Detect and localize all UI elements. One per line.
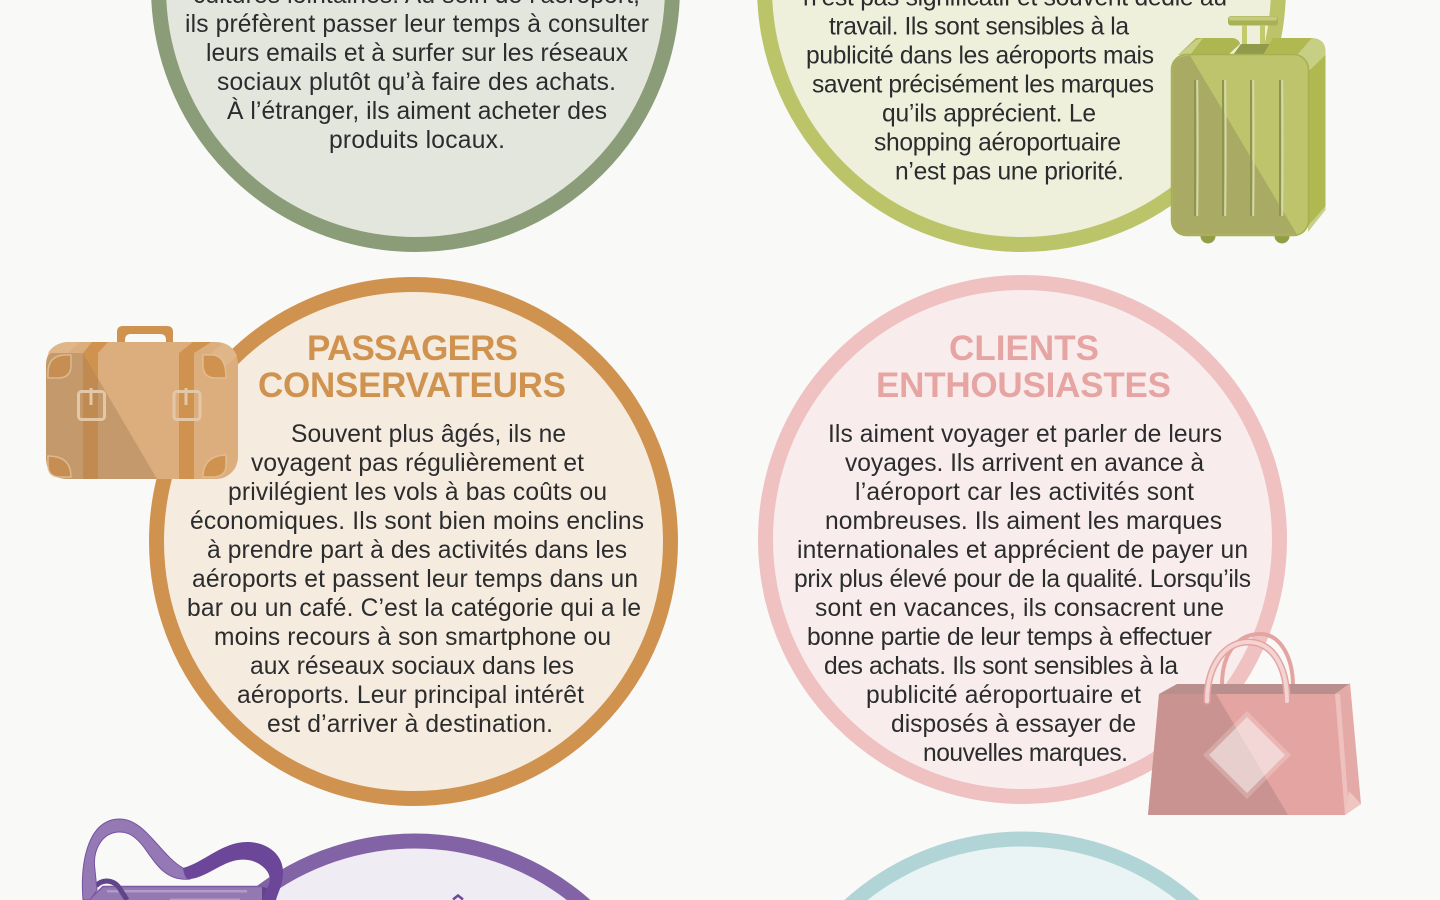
circle: purple disc xyxy=(240,833,590,900)
text block: clients enthousiastes description: publicité aéroportuaire et xyxy=(866,682,1141,709)
text block: clients enthousiastes description: voyages. Ils arrivent en avance à xyxy=(845,450,1204,477)
text block: passagers conservateurs description: privilégient les vols à bas coûts ou xyxy=(228,479,607,506)
heading: passagers conservateurs: CONSERVATEURS xyxy=(258,366,566,405)
text block: passagers conservateurs description: aéroports et passent leur temps dans un xyxy=(192,566,638,593)
panel: passagers conservateurs xyxy=(46,284,670,798)
circle: pink disc xyxy=(766,282,1280,796)
text block: top-left description: sociaux plutôt qu’à faire des achats. xyxy=(217,69,616,96)
panel: bottom-left passenger profile xyxy=(82,819,590,900)
text block: clients enthousiastes description xyxy=(794,421,1251,767)
text block: passagers conservateurs description: moins recours à son smartphone ou xyxy=(214,624,611,651)
heading: clients enthousiastes xyxy=(876,329,1171,405)
text block: clients enthousiastes description: bonne partie de leur temps à effectuer xyxy=(807,624,1212,651)
icon: green rolling suitcase xyxy=(1172,16,1326,244)
text block: top-left description: leurs emails et à surfer sur les réseaux xyxy=(206,40,629,67)
icon: purple handbag xyxy=(82,819,283,900)
text block: clients enthousiastes description: l’aéroport car les activités sont xyxy=(855,479,1194,506)
panel: bottom-right passenger profile xyxy=(844,832,1200,900)
text block: top-left description: À l’étranger, ils aiment acheter des xyxy=(227,98,607,125)
text block: top-right description: qu’ils apprécient. Le xyxy=(882,100,1096,127)
panel: clients enthousiastes xyxy=(766,282,1361,815)
text block: passagers conservateurs description: Souvent plus âgés, ils ne xyxy=(291,421,566,448)
icon: brown vintage suitcase xyxy=(46,326,238,479)
text block: clients enthousiastes description: Ils aiment voyager et parler de leurs xyxy=(828,421,1222,448)
text block: clients enthousiastes description: nouvelles marques. xyxy=(923,740,1128,767)
heading: clients enthousiastes: ENTHOUSIASTES xyxy=(876,366,1171,405)
text block: clients enthousiastes description: prix plus élevé pour de la qualité. Lorsqu’ils xyxy=(794,566,1251,593)
panel: top-right passenger profile xyxy=(764,0,1326,244)
text block: clients enthousiastes description: des achats. Ils sont sensibles à la xyxy=(824,653,1178,680)
heading fragment: circumflex accent of cropped title xyxy=(453,896,463,900)
text block: clients enthousiastes description: internationales et apprécient de payer un xyxy=(797,537,1248,564)
circle: orange disc xyxy=(156,284,670,798)
text block: top-right description: n’est pas une priorité. xyxy=(895,158,1124,185)
text block: passagers conservateurs description: économiques. Ils sont bien moins enclins xyxy=(190,508,644,535)
icon: pink shopping bag xyxy=(1148,634,1361,815)
circle: lime disc xyxy=(764,0,1278,244)
text block: clients enthousiastes description: sont en vacances, ils consacrent une xyxy=(815,595,1224,622)
text block: passagers conservateurs description: est d’arriver à destination. xyxy=(267,711,553,738)
heading: passagers conservateurs: PASSAGERS xyxy=(307,329,518,368)
text block: clients enthousiastes description: nombreuses. Ils aiment les marques xyxy=(825,508,1222,535)
text block: top-left description: produits locaux. xyxy=(329,127,505,154)
circle: green-grey disc xyxy=(158,0,672,244)
text block: top-right description xyxy=(803,0,1227,185)
text block: top-right description: savent précisément les marques xyxy=(812,71,1154,98)
text block: top-right description: shopping aéroportuaire xyxy=(874,129,1121,156)
text block: top-right description: travail. Ils sont sensibles à la xyxy=(829,13,1129,40)
text block: passagers conservateurs description: aéroports. Leur principal intérêt xyxy=(237,682,584,709)
text block: clients enthousiastes description: disposés à essayer de xyxy=(891,711,1136,738)
text block: top-right description: publicité dans les aéroports mais xyxy=(806,42,1154,69)
circle: teal disc xyxy=(844,832,1200,900)
text block: passagers conservateurs description: bar ou un café. C’est la catégorie qui a le xyxy=(187,595,641,622)
heading: passagers conservateurs xyxy=(258,329,566,405)
text block: top-left description: ils préfèrent passer leur temps à consulter xyxy=(185,11,649,38)
text block: passagers conservateurs description: voyagent pas régulièrement et xyxy=(251,450,584,477)
text block: passagers conservateurs description: aux réseaux sociaux dans les xyxy=(250,653,574,680)
text block: top-left description xyxy=(185,0,649,154)
panel: top-left passenger profile xyxy=(158,0,672,244)
text block: passagers conservateurs description: à prendre part à des activités dans les xyxy=(207,537,627,564)
heading: clients enthousiastes: CLIENTS xyxy=(949,329,1099,368)
text block: passagers conservateurs description xyxy=(187,421,644,738)
